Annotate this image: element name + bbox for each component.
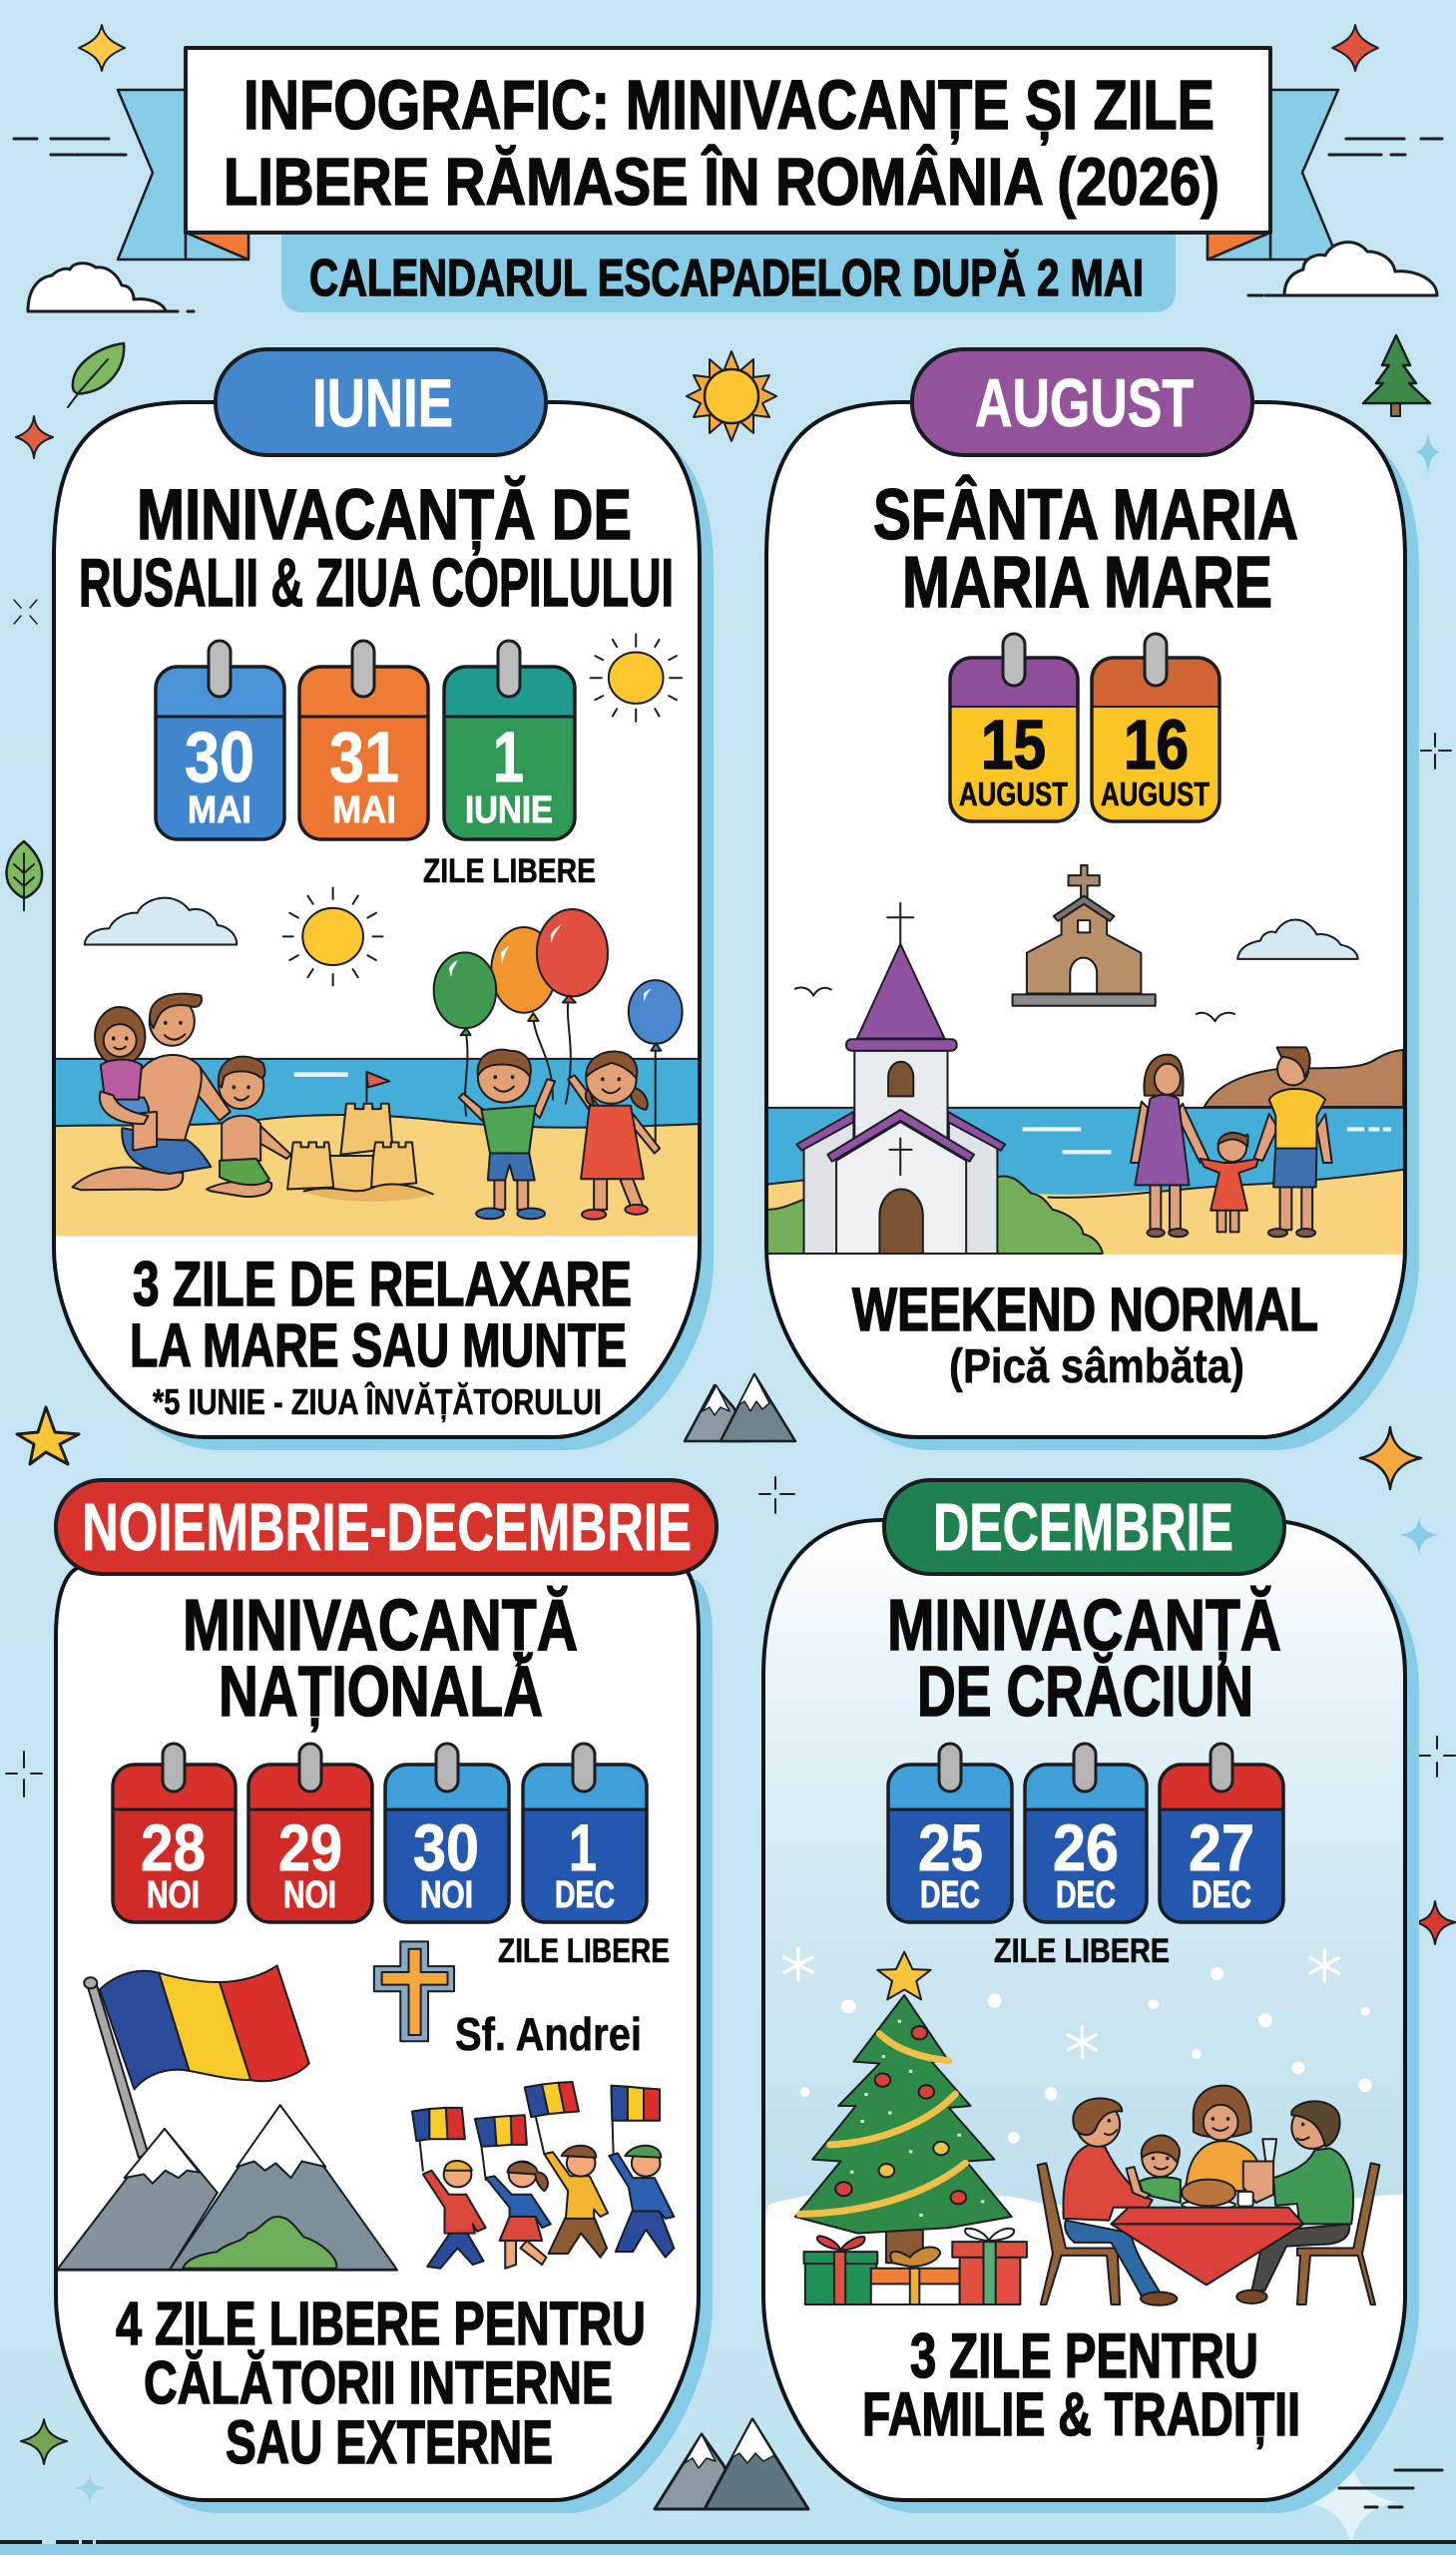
title box xyxy=(186,48,1270,233)
icon: cross xyxy=(374,1941,454,2041)
sparkle blue right xyxy=(1416,431,1440,475)
calendar 16 august xyxy=(1092,634,1219,821)
summary text: CĂLĂTORII INTERNE xyxy=(144,2349,613,2416)
heading: NAȚIONALĂ xyxy=(219,1653,543,1732)
star green xyxy=(21,2419,67,2464)
decorative sun xyxy=(687,351,776,441)
subtitle band: CALENDARUL ESCAPADELOR DUPĂ 2 MAI xyxy=(309,250,1144,307)
title box: INFOGRAFIC: MINIVACANȚE ȘI ZILE xyxy=(243,66,1214,145)
cloud left xyxy=(28,263,166,311)
calendar 29 noi: 29 xyxy=(278,1810,342,1884)
icon: beach sun xyxy=(283,887,382,985)
balloons xyxy=(434,909,683,1145)
calendar 29 noi: NOI xyxy=(283,1874,336,1916)
header banner xyxy=(118,48,1338,312)
star gold top left xyxy=(79,25,125,71)
summary text xyxy=(116,2290,646,2476)
sparkle white bottom right xyxy=(1304,2457,1397,2548)
icon: small chapel xyxy=(1013,865,1156,1006)
heading: MINIVACANȚĂ DE xyxy=(137,476,632,555)
dash before cloud right xyxy=(1248,293,1284,297)
calendar 28 noi: 28 xyxy=(141,1810,206,1884)
month pill xyxy=(216,349,546,455)
zile libere label: ZILE LIBERE xyxy=(994,1932,1170,1970)
month pill: DECEMBRIE xyxy=(933,1490,1233,1565)
calendar 25 dec: 25 xyxy=(918,1810,983,1884)
star red left xyxy=(16,416,53,458)
summary text xyxy=(862,2321,1300,2449)
kids with balloons xyxy=(459,1050,660,1220)
panel shadow xyxy=(70,1580,713,2513)
snowflakes and dots xyxy=(784,1949,1372,2144)
calendar 25 dec: DEC xyxy=(920,1874,980,1916)
sf. andrei label: Sf. Andrei xyxy=(455,2008,642,2060)
star red top right xyxy=(1332,25,1378,71)
month pill xyxy=(56,1480,717,1574)
calendar 30 mai xyxy=(156,641,284,839)
beach illustration xyxy=(54,635,698,1236)
star gold left xyxy=(17,1407,79,1464)
calendar 1 dec: DEC xyxy=(555,1874,615,1916)
calendar 27 dec: 27 xyxy=(1189,1810,1254,1884)
christmas illustration xyxy=(768,1949,1403,2312)
marching kid 1 xyxy=(412,2108,486,2269)
speed lines xyxy=(14,139,1442,155)
month pill xyxy=(884,1480,1284,1574)
plus centre xyxy=(759,1477,794,1513)
tree xyxy=(1363,335,1430,416)
calendar 15 august xyxy=(950,634,1078,821)
summary text: *5 IUNIE - ZIUA ÎNVĂȚĂTORULUI xyxy=(153,1380,602,1422)
month pill: IUNIE xyxy=(312,365,453,441)
sea xyxy=(767,1108,1403,1198)
family dinner xyxy=(1038,2086,1379,2305)
sparkle blue bottom left xyxy=(73,2472,107,2505)
calendar 26 dec xyxy=(1025,1744,1147,1922)
month pill xyxy=(912,349,1252,455)
bottom line xyxy=(0,2540,1456,2544)
summary text: (Pică sâmbăta) xyxy=(949,1340,1244,1393)
calendar 1 dec xyxy=(523,1744,647,1922)
boy sitting xyxy=(207,1057,291,1197)
summary text: 4 ZILE LIBERE PENTRU xyxy=(116,2290,646,2357)
calendar 30 noi: 30 xyxy=(413,1810,479,1884)
calendar 26 dec: 26 xyxy=(1053,1810,1119,1884)
calendar 31 mai: MAI xyxy=(332,789,396,831)
flag xyxy=(84,1965,309,2158)
heading: MINIVACANȚĂ xyxy=(183,1586,578,1666)
panel body xyxy=(56,1567,699,2500)
snow hill xyxy=(768,2192,1403,2312)
month pill: AUGUST xyxy=(975,365,1194,441)
sparkle blue right lower xyxy=(1400,1515,1439,1556)
panel: august xyxy=(766,349,1419,1450)
sandcastle xyxy=(287,1072,433,1202)
summary text: 3 ZILE PENTRU xyxy=(910,2321,1258,2391)
calendar 1 dec: 1 xyxy=(569,1810,597,1884)
cloud right xyxy=(1284,243,1437,295)
panel shadow xyxy=(68,415,714,1450)
panel body xyxy=(763,1520,1405,2500)
calendar 30 noi: NOI xyxy=(420,1874,473,1916)
calendar 30 mai: MAI xyxy=(188,789,251,831)
calendar 25 dec xyxy=(888,1744,1012,1922)
calendar 1 iunie: IUNIE xyxy=(465,789,553,831)
calendar 15 august: AUGUST xyxy=(959,775,1068,812)
star orange right xyxy=(1360,1427,1421,1489)
title box: LIBERE RĂMASE ÎN ROMÂNIA (2026) xyxy=(224,145,1219,220)
ribbon tail right lower xyxy=(1208,233,1270,259)
panel outline xyxy=(763,1520,1405,2500)
month pill: NOIEMBRIE-DECEMBRIE xyxy=(82,1490,692,1565)
marching kid 4 xyxy=(609,2086,674,2258)
calendar 1 iunie xyxy=(444,641,575,839)
heading xyxy=(873,475,1298,623)
panel: noiembrie-decembrie xyxy=(56,1480,717,2513)
leaf left xyxy=(7,841,42,910)
calendar 1 iunie: 1 xyxy=(493,719,524,797)
church xyxy=(796,903,1005,1254)
ribbon fold left xyxy=(186,233,248,259)
summary text: 3 ZILE DE RELAXARE xyxy=(133,1250,632,1319)
bottom strip xyxy=(0,2544,1456,2555)
gifts xyxy=(804,2229,1027,2304)
panel shadow xyxy=(780,415,1419,1450)
icon: cloud xyxy=(1237,920,1358,959)
family xyxy=(1131,1047,1332,1237)
summary text: SAU EXTERNE xyxy=(226,2408,553,2476)
sand xyxy=(767,1170,1403,1255)
calendar 27 dec xyxy=(1160,1744,1283,1922)
ribbon tail right xyxy=(1270,90,1338,259)
subtitle band xyxy=(281,235,1176,312)
calendar 29 noi xyxy=(248,1744,372,1922)
star red right xyxy=(1415,1901,1456,1944)
heading: MARIA MARE xyxy=(902,543,1272,623)
panel outline xyxy=(766,402,1405,1437)
icon: small sun xyxy=(591,635,682,722)
sand xyxy=(54,1115,698,1236)
summary text xyxy=(130,1250,632,1422)
panel outline xyxy=(56,1567,699,2500)
summary text xyxy=(852,1276,1318,1393)
zile libere label: ZILE LIBERE xyxy=(498,1932,670,1970)
zile libere label: ZILE LIBERE xyxy=(423,852,596,890)
calendar 15 august: 15 xyxy=(981,706,1046,783)
heading: SFÂNTA MARIA xyxy=(873,475,1298,555)
father xyxy=(73,994,231,1190)
marching kid 3 xyxy=(525,2082,608,2258)
panel outline xyxy=(54,402,700,1437)
calendar 26 dec: DEC xyxy=(1056,1874,1116,1916)
calendar 27 dec: DEC xyxy=(1192,1874,1251,1916)
icon: birds xyxy=(795,987,1234,1021)
heading: RUSALII & ZIUA COPILULUI xyxy=(79,545,674,621)
national illustration xyxy=(57,1941,674,2271)
panel body xyxy=(766,402,1405,1437)
sea xyxy=(54,1059,698,1145)
church seaside illustration xyxy=(767,865,1403,1255)
ribbon fold right xyxy=(1208,233,1270,259)
heading: DE CRĂCIUN xyxy=(917,1653,1253,1732)
summary text: FAMILIE & TRADIȚII xyxy=(862,2380,1300,2449)
icon: cloud xyxy=(85,898,237,945)
panel shadow xyxy=(777,1533,1419,2513)
calendar 30 mai: 30 xyxy=(185,719,254,797)
plus left xyxy=(6,1752,42,1796)
summary text: WEEKEND NORMAL xyxy=(852,1276,1318,1343)
ribbon tail left xyxy=(118,90,186,259)
bushes xyxy=(767,1200,804,1254)
calendar 16 august: 16 xyxy=(1124,706,1189,783)
heading xyxy=(79,476,674,621)
ribbon tail left lower xyxy=(186,233,248,259)
panel: iunie xyxy=(54,349,714,1450)
mountains xyxy=(57,2105,397,2271)
calendar 30 noi xyxy=(385,1744,509,1922)
calendar 16 august: AUGUST xyxy=(1101,775,1210,812)
dash after cloud left xyxy=(166,309,194,313)
calendar 28 noi: NOI xyxy=(147,1874,200,1916)
heading: MINIVACANȚĂ xyxy=(887,1586,1281,1666)
plus right lower xyxy=(1419,1737,1455,1777)
calendar 31 mai xyxy=(299,641,428,839)
calendar 31 mai: 31 xyxy=(329,719,399,797)
girl held by father xyxy=(95,1007,157,1151)
hill xyxy=(1205,1050,1403,1107)
calendar 28 noi xyxy=(113,1744,236,1922)
marching kid 2 xyxy=(475,2115,551,2269)
mountains bottom xyxy=(655,2419,808,2509)
mountains middle xyxy=(685,1374,795,1441)
panel: decembrie xyxy=(763,1480,1419,2513)
plus right xyxy=(1421,734,1451,768)
heading xyxy=(183,1586,578,1732)
christmas tree xyxy=(795,1952,1012,2263)
speed lines bottom right xyxy=(1339,2470,1442,2507)
heading xyxy=(887,1586,1281,1732)
summary text: LA MARE SAU MUNTE xyxy=(130,1311,627,1379)
sparkle x left xyxy=(14,600,37,624)
leaf xyxy=(68,343,124,407)
panel body xyxy=(54,402,700,1437)
